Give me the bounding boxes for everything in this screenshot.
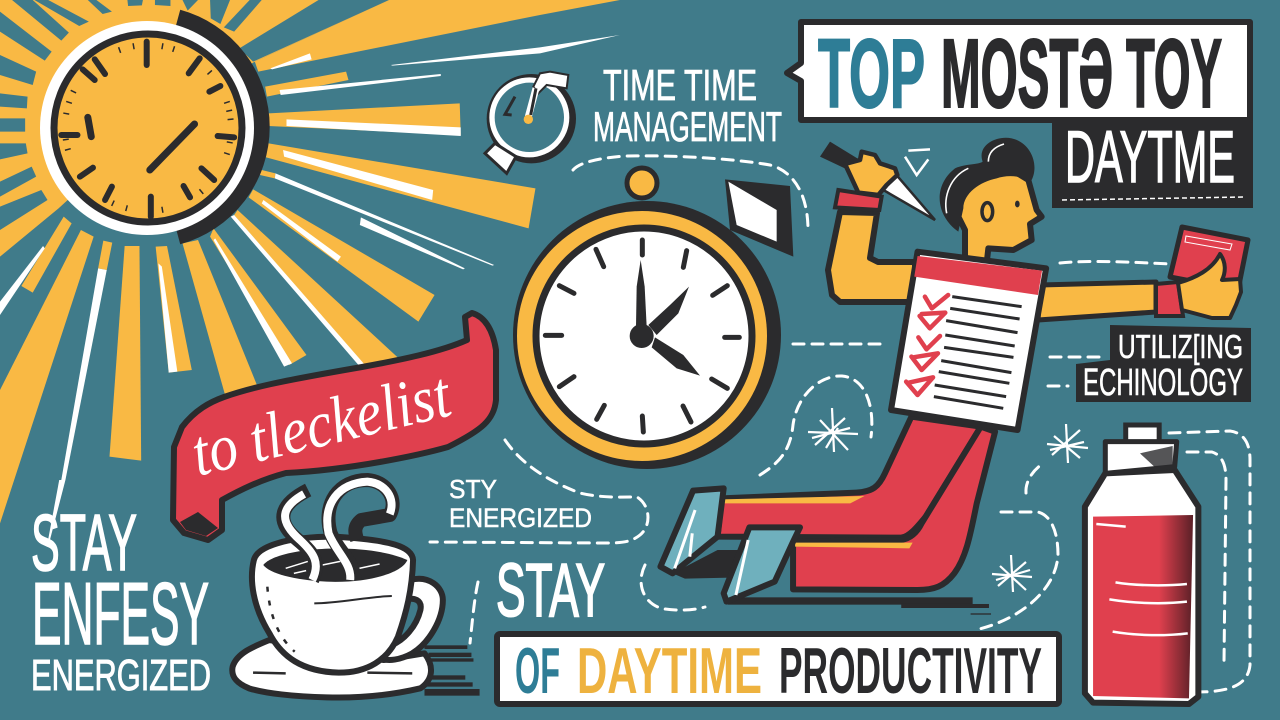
title banner: of daytime productivity bbox=[497, 634, 1059, 707]
callout: top most toy daytime bbox=[787, 19, 1253, 208]
person: checklist torso bbox=[891, 252, 1046, 430]
label: stay: STAY bbox=[496, 548, 605, 632]
dashed connector lines bbox=[430, 156, 1250, 692]
title banner: of daytime productivity: DAYTIME bbox=[577, 634, 762, 707]
heading: stay enfesy energized: ENERGIZED bbox=[31, 651, 211, 700]
sun rays bbox=[0, 0, 620, 547]
big clock bbox=[513, 168, 781, 469]
icon: small clock bbox=[485, 72, 576, 173]
icon: water bottle bbox=[1085, 425, 1198, 704]
person: raised arm with pencil bbox=[820, 142, 935, 302]
callout: top most toy daytime: TOP bbox=[818, 19, 925, 128]
icon: sparkle bottle bbox=[1047, 424, 1088, 463]
banner: to checklist bbox=[173, 313, 496, 540]
person: legs bbox=[660, 417, 995, 615]
heading: stay enfesy energized: ENFESY bbox=[32, 564, 209, 663]
label: utilizing technology bbox=[1076, 325, 1251, 404]
label: time time management: TIME TIME bbox=[603, 61, 757, 110]
person: head bbox=[940, 138, 1042, 263]
label: sty energized bbox=[449, 474, 592, 533]
heading: stay enfesy energized bbox=[31, 498, 211, 700]
heading: stay enfesy energized: STAY bbox=[31, 498, 137, 587]
icon: stopwatch flag bbox=[725, 179, 793, 257]
label: sty energized: STY bbox=[449, 474, 497, 504]
banner text: to tleckelist bbox=[184, 358, 459, 491]
icon: sparkle bottom bbox=[992, 555, 1032, 592]
label: time time management bbox=[593, 61, 782, 150]
icon: sparkle left bbox=[808, 408, 858, 452]
label: sty energized: ENERGIZED bbox=[449, 503, 592, 533]
icon: check mark spark bbox=[905, 149, 930, 175]
icon: coffee cup bbox=[232, 480, 480, 698]
person: outstretched arm with phone bbox=[1038, 227, 1248, 320]
sun clock dial bbox=[40, 18, 261, 236]
title banner: of daytime productivity: PRODUCTIVITY bbox=[779, 634, 1042, 707]
label: time time management: MANAGEMENT bbox=[593, 103, 782, 150]
title banner: of daytime productivity: OF bbox=[515, 634, 560, 707]
